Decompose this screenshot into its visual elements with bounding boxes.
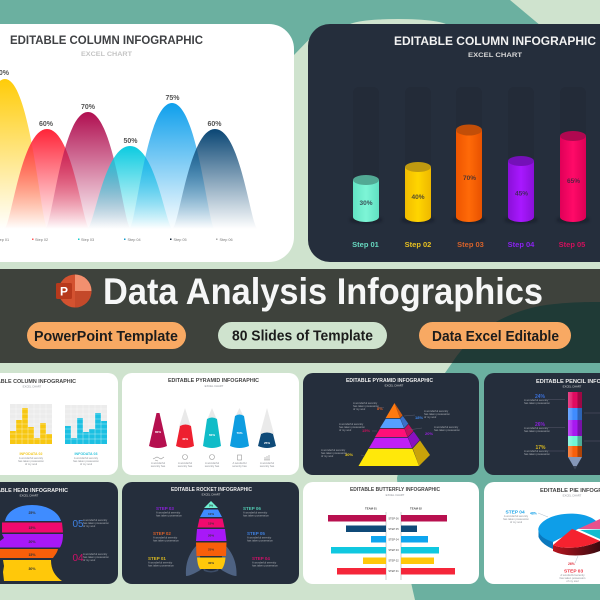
step callouts — [148, 506, 278, 568]
callout: step 04 — [503, 510, 548, 524]
captions with icons: A wonderful — [151, 461, 165, 465]
legend: Step 05 — [174, 238, 187, 242]
step labels: Step 03 — [457, 240, 484, 249]
subheading: EXCEL CHART — [205, 384, 224, 388]
callout: step 03 — [560, 556, 586, 583]
chart: butterfly bars: STEP 04 — [388, 538, 399, 542]
callouts: A wonderful serenity — [424, 409, 449, 413]
callouts: has taken possession — [424, 412, 450, 416]
step callouts: A wonderful serenity — [243, 510, 268, 514]
callouts: 20% — [425, 431, 433, 436]
callout: step 03: has taken possession — [560, 576, 586, 580]
value labels: 60% — [39, 121, 54, 128]
caption: infodata 02: of my soul — [25, 462, 38, 466]
caption: infodata 02: A wonderful serenity — [19, 456, 44, 460]
chart: rocket — [186, 501, 237, 576]
captions with icons: serenity has — [205, 464, 220, 468]
panel: dark head thumbnail — [0, 482, 118, 584]
caption: infodata 03: INFODATA 03 — [75, 452, 97, 456]
step callouts: has taken possession — [252, 564, 278, 568]
callout: step 04: A wonderful serenity — [504, 514, 529, 518]
chart: cones: 80% — [155, 430, 161, 434]
chart: 3D cylinders — [350, 124, 588, 223]
step labels: Step 04 — [508, 240, 535, 249]
callout: step 04: 48% — [530, 512, 537, 516]
legend — [0, 238, 232, 242]
step callouts: A wonderful serenity — [247, 536, 272, 540]
pill: Data Excel Editable: Data Excel Editable — [432, 329, 559, 345]
callouts: 24% — [535, 394, 546, 400]
panel: column bars thumbnail — [0, 373, 118, 475]
callouts: has taken possession — [524, 452, 550, 456]
callout: step 04: STEP 04 — [506, 510, 525, 516]
chart: butterfly bars: TEAM 01 — [365, 506, 377, 510]
callouts: of my soul — [321, 454, 334, 458]
caption: infodata 03: of my soul — [80, 462, 93, 466]
chart: rocket: 10% — [208, 512, 214, 516]
callouts: has taken possession — [524, 401, 550, 405]
heading: light column chart title: EDITABLE COLUMN INFOGRAPHIC — [10, 35, 203, 47]
chart: rocket: 20% — [208, 534, 214, 538]
chart: butterfly bars: STEP 01 — [388, 569, 399, 573]
chart: rocket: 5% — [209, 504, 213, 508]
panel: dark pencil thumbnail — [484, 373, 600, 475]
value labels — [0, 70, 222, 145]
callouts: 17% — [535, 445, 546, 451]
chart: 3D cylinders: 70% — [463, 175, 476, 182]
callout: 04: 04 — [72, 553, 84, 564]
callout: step 03: of my soul — [566, 579, 579, 583]
callout: step 03: 26% — [568, 562, 575, 566]
heading: EDITABLE BUTTERFLY INFOGRAPHIC — [350, 487, 440, 493]
captions with icons: serenity has — [232, 464, 247, 468]
callouts: A wonderful serenity — [524, 449, 549, 453]
subheading: excel chart: EXCEL CHART — [468, 52, 522, 59]
step callouts: A wonderful serenity — [252, 560, 277, 564]
step callouts: STEP 05 — [247, 531, 265, 536]
callouts: has taken possession — [434, 428, 460, 432]
chart: cones: 40% — [182, 437, 188, 441]
step callouts: has taken possession — [243, 514, 269, 518]
chart: head layers: 15% — [28, 553, 36, 557]
chart: butterfly bars: STEP 05 — [388, 527, 399, 531]
step callouts: has taken possession — [247, 538, 273, 542]
subheading: EXCEL CHART — [20, 494, 39, 498]
pill: 80 Slides of Template — [218, 322, 387, 349]
chart: 3D cylinders: 40% — [411, 194, 425, 201]
callout: 05: 05 — [72, 519, 84, 530]
caption: infodata 03: A wonderful serenity — [74, 456, 99, 460]
step callouts: A wonderful serenity — [153, 536, 178, 540]
step callouts: STEP 04 — [252, 556, 270, 561]
chart: cones — [149, 408, 276, 448]
captions with icons: serenity has — [260, 464, 275, 468]
legend: Step 04 — [128, 238, 141, 242]
callouts: of my soul — [339, 428, 352, 432]
step callouts: has taken possession — [156, 514, 182, 518]
callouts: 15% — [362, 428, 370, 433]
panel: dark column infographic — [308, 24, 600, 262]
subheading: EXCEL CHART — [563, 494, 582, 498]
chart: 3D pie — [538, 514, 600, 556]
chart: butterfly bars: STEP 02 — [388, 558, 399, 562]
chart: cones: 60% — [209, 433, 215, 437]
subheading: EXCEL CHART — [385, 384, 404, 388]
chart: butterfly bars: STEP 06 — [388, 516, 399, 520]
subheading: EXCEL CHART — [386, 493, 405, 497]
chart: cyan bars — [65, 405, 107, 444]
callouts: 18% — [415, 415, 423, 420]
chart: head layers: 15% — [28, 526, 36, 530]
heading: EDITABLE PYRAMID INFOGRAPHIC — [346, 378, 433, 384]
captions with icons: A wonderful — [178, 461, 192, 465]
callout: 05: A wonderful serenity — [83, 518, 108, 522]
callouts: 26% — [535, 422, 546, 428]
callout: step 03: STEP 03 — [564, 568, 583, 574]
chart: head layers: 30% — [28, 567, 36, 571]
callouts: A wonderful serenity — [434, 425, 459, 429]
chart: pencil — [568, 392, 582, 470]
callouts: 30% — [345, 452, 353, 457]
icon: PowerPoint logo: P — [60, 284, 68, 298]
panel: butterfly chart thumbnail — [303, 482, 479, 584]
title: Data Analysis Infographics — [103, 271, 543, 312]
step callouts: A wonderful serenity — [156, 510, 181, 514]
callouts: has taken possession — [321, 451, 347, 455]
caption: infodata 03: has taken possession — [73, 459, 99, 463]
chart: 3D pyramid — [358, 403, 430, 466]
icon: PowerPoint logo — [56, 274, 92, 308]
legend: Step 06 — [220, 238, 233, 242]
step callouts: STEP 03 — [156, 506, 174, 511]
callout: step 04: has taken possession — [503, 517, 529, 521]
caption: infodata 03 — [73, 452, 99, 466]
caption: infodata 02 — [18, 452, 44, 466]
pill: PowerPoint Template: PowerPoint Template — [34, 329, 178, 345]
caption: infodata 02: has taken possession — [18, 459, 44, 463]
callout: step 03: A wonderful serenity — [560, 573, 585, 577]
value labels: 60% — [207, 121, 222, 128]
callouts: of my soul — [424, 415, 437, 419]
step callouts: has taken possession — [148, 564, 174, 568]
step labels: Step 01 — [352, 240, 379, 249]
panel: cone pyramid thumbnail — [122, 373, 299, 475]
step callouts: STEP 06 — [243, 506, 261, 511]
chart: butterfly bars — [328, 506, 455, 580]
step callouts: A wonderful serenity — [148, 560, 173, 564]
chart: 3D cylinders: 45% — [515, 190, 528, 198]
captions with icons: serenity has — [151, 464, 166, 468]
chart: 3D cylinders: 65% — [567, 178, 580, 185]
chart: head layers — [0, 505, 63, 581]
chart: head layers: 25% — [28, 511, 36, 515]
pill: Data Excel Editable — [419, 322, 571, 349]
chart: rocket: 25% — [208, 548, 214, 552]
callout: 04: of my soul — [83, 558, 96, 562]
subheading: EXCEL CHART — [563, 384, 582, 388]
step callouts: has taken possession — [153, 538, 179, 542]
panel: light column infographic — [0, 24, 294, 262]
captions with icons: serenity has — [178, 464, 193, 468]
callouts: 8% — [377, 406, 383, 411]
callouts: has taken possession — [524, 429, 550, 433]
captions with icons: A wonderful — [232, 461, 247, 465]
heading: EDITABLE PYRAMID INFOGRAPHIC — [168, 378, 259, 384]
chart: cones: 70% — [236, 431, 243, 435]
callouts: A wonderful serenity — [524, 426, 549, 430]
chart: rocket: 15% — [208, 522, 214, 526]
callouts: A wonderful serenity — [353, 401, 378, 405]
step labels — [352, 242, 586, 248]
legend: Step 02 — [35, 238, 48, 242]
legend: Step 03 — [81, 238, 94, 242]
callouts: A wonderful serenity — [339, 422, 364, 426]
callout: step 04: of my soul — [510, 520, 523, 524]
chart: butterfly bars: TEAM 02 — [410, 506, 422, 510]
step labels: Step 05 — [559, 240, 585, 249]
value labels: 50% — [123, 138, 138, 145]
callouts: has taken possession — [353, 404, 379, 408]
banner — [0, 269, 600, 363]
subheading: excel chart: EXCEL CHART — [81, 51, 132, 58]
captions with icons: A wonderful — [260, 461, 274, 465]
heading: EDITABLE ROCKET INFOGRAPHIC — [171, 487, 252, 493]
chart: overlapping bell columns — [0, 79, 258, 229]
callouts: has taken possession — [339, 425, 365, 429]
callouts — [524, 394, 600, 456]
subheading: EXCEL CHART — [202, 492, 221, 496]
callout: 04 — [72, 553, 109, 562]
panel: dark pyramid thumbnail — [303, 373, 479, 475]
callout: 05 — [72, 519, 109, 528]
heading: dark column chart title: EDITABLE COLUMN INFOGRAPHIC — [394, 36, 596, 48]
callouts: A wonderful serenity — [524, 398, 549, 402]
callout: 04: A wonderful serenity — [83, 552, 108, 556]
callouts: of my soul — [353, 407, 366, 411]
chart: cones: 25% — [264, 441, 270, 445]
captions with icons: A wonderful — [205, 461, 219, 465]
value labels: 70% — [81, 104, 96, 111]
callout: 04: has taken possession — [83, 555, 109, 559]
caption: infodata 02: INFODATA 02 — [20, 452, 42, 456]
value labels: 75% — [165, 95, 180, 102]
chart: butterfly bars: STEP 03 — [388, 548, 399, 552]
pill: 80 Slides of Template: 80 Slides of Template — [232, 328, 373, 344]
subheading: EXCEL CHART — [23, 384, 42, 388]
panel: 3D pie thumbnail — [484, 482, 600, 584]
chart: head layers: 20% — [28, 540, 36, 544]
captions with icons — [151, 454, 275, 468]
pill: PowerPoint Template — [27, 322, 186, 349]
step callouts: STEP 02 — [153, 531, 171, 536]
callout: 05: of my soul — [83, 524, 96, 528]
step callouts: STEP 01 — [148, 556, 166, 561]
chart: 3D cylinders: 30% — [359, 200, 373, 207]
callouts — [321, 401, 460, 458]
step labels: Step 02 — [405, 240, 431, 249]
panel: dark rocket thumbnail — [122, 482, 299, 584]
callout: 05: has taken possession — [83, 521, 109, 525]
callouts: A wonderful serenity — [321, 448, 346, 452]
chart: yellow bars — [10, 404, 52, 444]
chart: rocket: 30% — [208, 561, 214, 565]
